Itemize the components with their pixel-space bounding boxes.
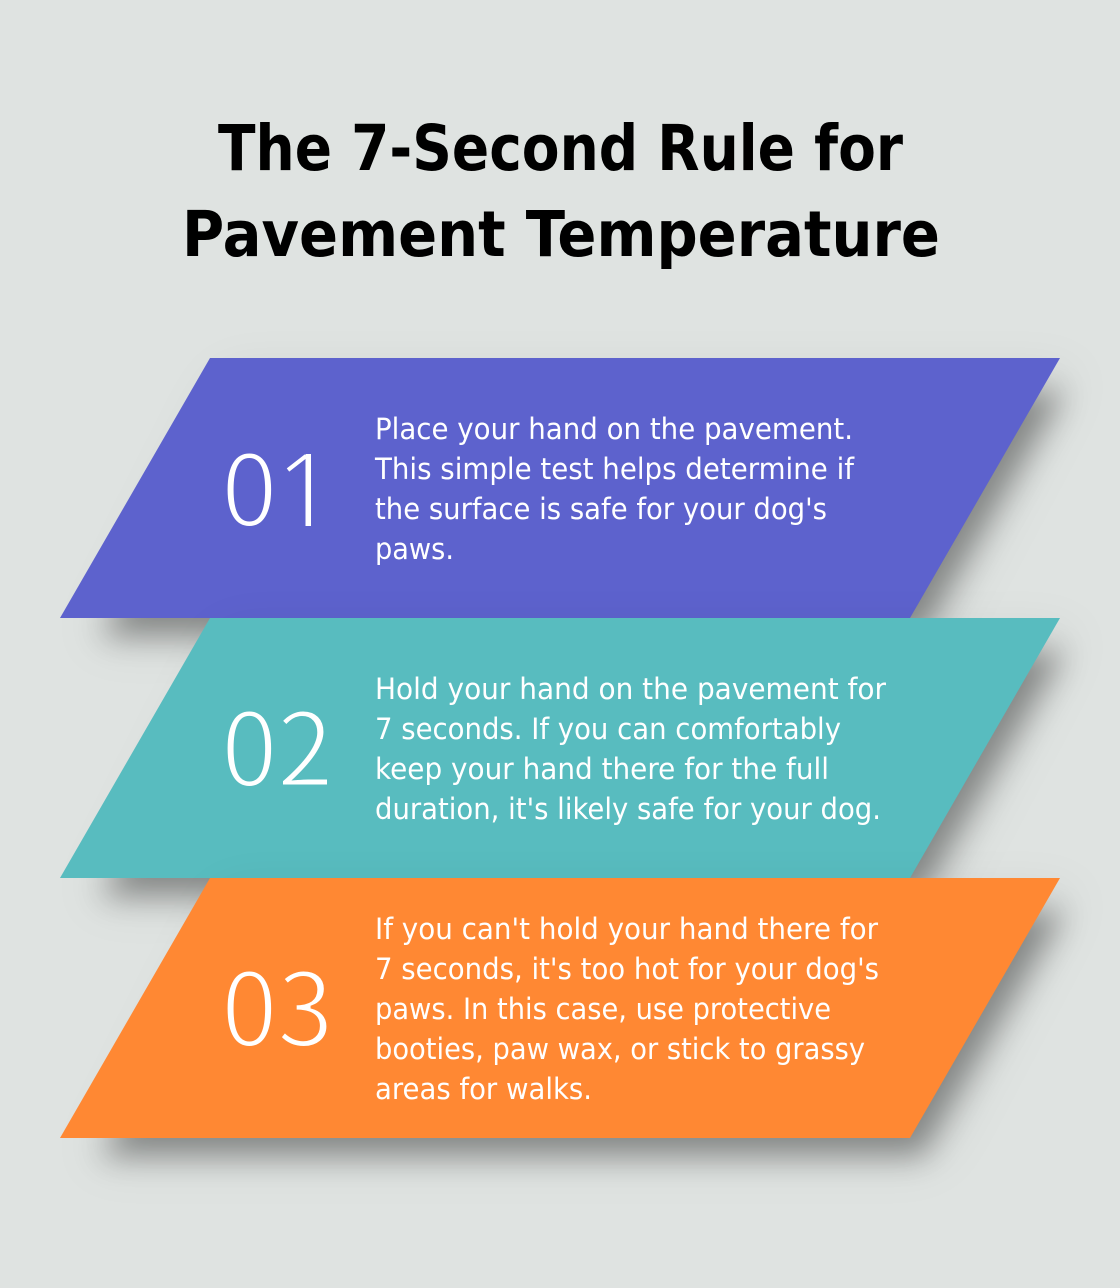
text: step 01: Place your hand on the pavement.	[375, 412, 853, 446]
text: step 01	[374, 412, 855, 566]
text: step 03: areas for walks.	[375, 1072, 592, 1106]
number 03: 03	[221, 929, 334, 1076]
number 01: 0	[221, 409, 278, 556]
number 02: 02	[221, 669, 334, 816]
panel: step 03	[60, 878, 1080, 1165]
text: step 02: Hold your hand on the pavement for	[375, 672, 886, 706]
text: step 02: keep your hand there for the full	[375, 752, 829, 786]
text: step 01: This simple test helps determine if	[374, 452, 855, 486]
title: The 7-Second Rule for	[218, 112, 903, 185]
panel: step 02	[60, 618, 1080, 905]
title	[182, 112, 940, 271]
text: step 02	[375, 672, 886, 826]
text: step 02: duration, it's likely safe for your dog.	[375, 792, 881, 826]
number 01: 1	[277, 409, 334, 556]
number 01	[228, 454, 311, 526]
text: step 03: booties, paw wax, or stick to grassy	[375, 1032, 865, 1066]
text: step 01: the surface is safe for your dog's	[375, 492, 827, 526]
panel: step 01	[60, 358, 1080, 645]
text: step 03: paws. In this case, use protective	[375, 992, 831, 1026]
text: step 03: 7 seconds, it's too hot for your dog's	[375, 952, 879, 986]
text: step 03: If you can't hold your hand there for	[375, 912, 878, 946]
text: step 02: 7 seconds. If you can comfortably	[375, 712, 841, 746]
title: Pavement Temperature	[182, 198, 940, 271]
text: step 03	[375, 912, 879, 1106]
text: step 01: paws.	[375, 532, 454, 566]
